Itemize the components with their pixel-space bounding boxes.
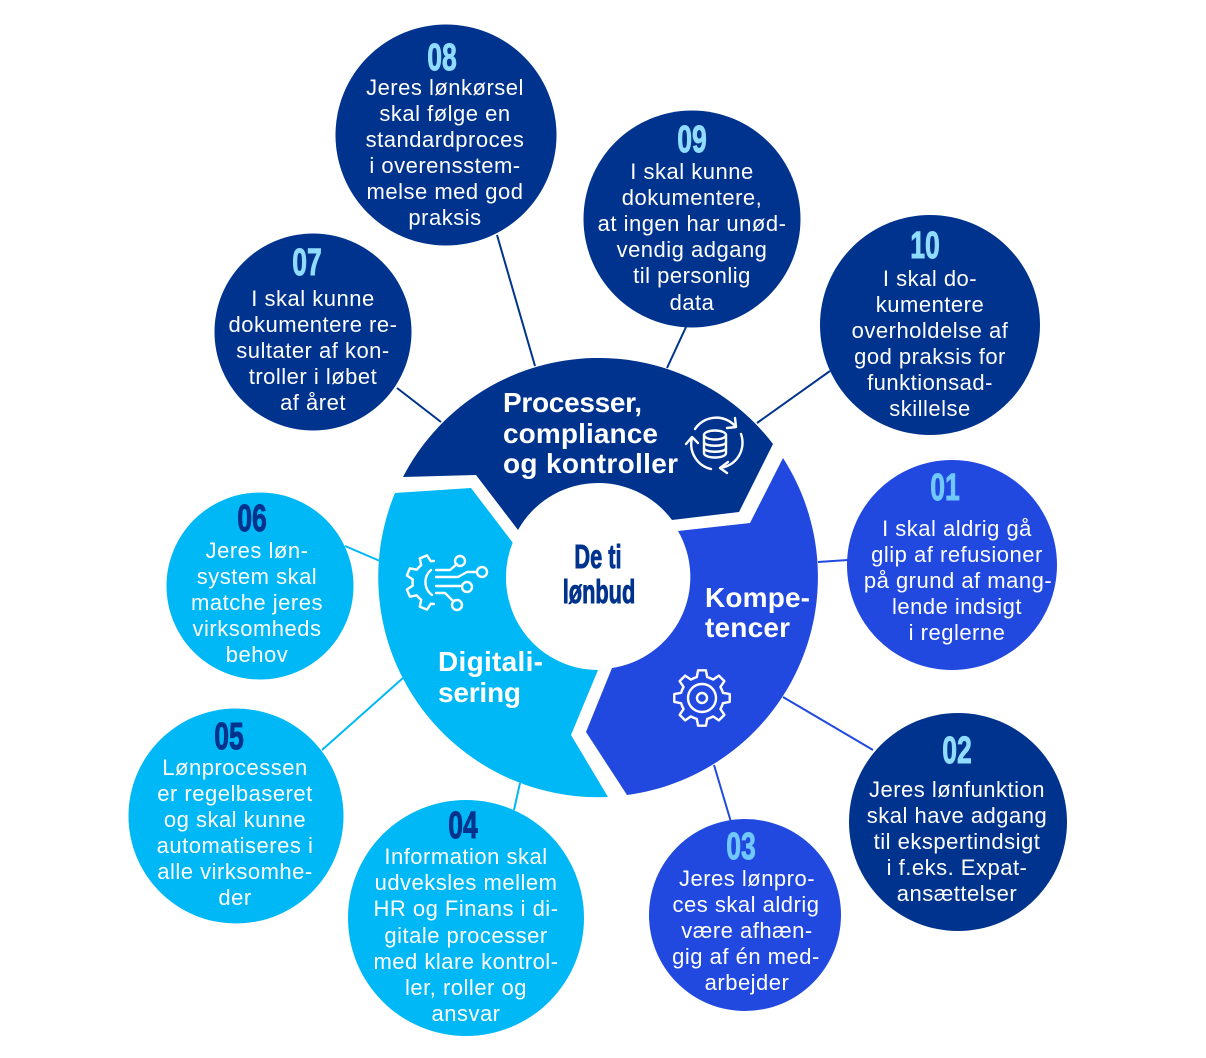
bubble 01: på grund af mang- (864, 568, 1052, 593)
bubble 01: glip af refusioner (871, 542, 1043, 567)
bubble 06: 06 (237, 496, 267, 539)
ring segment: Processer, compliance og kontroller: og kontroller (503, 448, 678, 479)
bubble 10: kumentere (876, 292, 984, 317)
bubble 03: gig af én med- (672, 944, 820, 969)
ring segment: Kompetencer (586, 458, 818, 795)
bubble 07: I skal kunne (251, 286, 375, 311)
bubble 02: ansættelser (897, 881, 1017, 906)
bubble 08: 08 (427, 35, 457, 78)
bubble 09 (584, 110, 800, 328)
bubble 10 (820, 215, 1040, 435)
bubble 08 (336, 24, 556, 246)
bubble 09: 09 (677, 117, 707, 160)
ring segment: Kompetencer: tencer (705, 612, 790, 643)
bubble 05: automatiseres i (157, 833, 313, 858)
bubble 08: i overensstem- (369, 153, 521, 178)
bubble 05: er regelbaseret (157, 781, 313, 806)
bubble 06: matche jeres (191, 590, 323, 615)
bubble 06: system skal (197, 564, 317, 589)
bubble 04: HR og Finans i di- (373, 896, 559, 921)
bubble 08: standardproces (366, 127, 524, 152)
bubble 02: Jeres lønfunktion (869, 777, 1045, 802)
bubble 06: behov (226, 642, 288, 667)
bubble 08: praksis (408, 205, 482, 230)
bubble 06 (166, 492, 354, 680)
center title: De ti lønbud: lønbud (563, 573, 635, 610)
bubble 05: og skal kunne (164, 807, 306, 832)
bubble 07: 07 (292, 240, 322, 283)
bubble 03: 03 (726, 824, 756, 867)
bubble 03: arbejder (705, 970, 789, 995)
ring segment: Processer, compliance og kontroller: compliance (503, 418, 658, 449)
bubble 09: vendig adgang (617, 237, 767, 262)
bubble 07: sultater af kon- (236, 338, 390, 363)
bubble 02 (849, 713, 1067, 931)
bubble 03: ces skal aldrig (673, 892, 819, 917)
bubble 09: til personlig (633, 263, 751, 288)
bubble 04: gitale processer (384, 923, 548, 948)
bubble 01: lende indsigt (892, 594, 1022, 619)
bubble 10: I skal do- (883, 266, 977, 291)
bubble 02: skal have adgang (867, 803, 1047, 828)
bubble 05: der (218, 885, 252, 910)
bubble 04: ansvar (431, 1001, 501, 1026)
bubble 08: Jeres lønkørsel (366, 75, 524, 100)
bubble 10: funktionsad- (867, 370, 993, 395)
bubble 10: god praksis for (854, 344, 1006, 369)
bubble 01: 01 (930, 465, 960, 508)
center title: De ti lønbud (506, 485, 690, 669)
bubble 05: Lønprocessen (162, 755, 308, 780)
ring segment: Processer, compliance og kontroller (403, 358, 773, 530)
bubble 09: dokumentere, (622, 185, 762, 210)
bubble 06: virksomheds (193, 616, 321, 641)
bubble 02: 02 (942, 728, 972, 771)
bubble 07: af året (280, 390, 346, 415)
bubble 09: I skal kunne (630, 159, 754, 184)
icon: gear (674, 670, 730, 726)
bubble 05 (128, 708, 344, 924)
bubble 08: melse med god (367, 179, 523, 204)
bubble 01: i reglerne (909, 620, 1005, 645)
bubble 08: skal følge en (379, 101, 511, 126)
bubble 06: Jeres løn- (206, 538, 308, 563)
bubble 07 (214, 234, 412, 430)
bubble 04: Information skal (384, 844, 548, 869)
ring segment: Processer, compliance og kontroller: Processer, (503, 387, 642, 418)
icon: database with circular arrows (686, 418, 743, 473)
bubble 04 (348, 800, 584, 1036)
bubble 10: overholdelse af (852, 318, 1009, 343)
bubble 09: at ingen har unød- (598, 211, 786, 236)
bubble 04: ler, roller og (405, 975, 527, 1000)
bubble 10: skillelse (889, 396, 971, 421)
bubble 02: til ekspertindsigt (874, 829, 1040, 854)
bubble 01: I skal aldrig gå (882, 516, 1032, 541)
bubble 04: 04 (448, 803, 478, 846)
bubble 03: være afhæn- (681, 918, 813, 943)
ring segment: Digitalisering (378, 488, 608, 797)
bubble 05: 05 (214, 714, 244, 757)
bubble 04: med klare kontrol- (373, 949, 559, 974)
bubble 07: dokumentere re- (229, 312, 397, 337)
icon: gear with circuit lines (405, 554, 487, 611)
bubble 02: i f.eks. Expat- (887, 855, 1027, 880)
bubble 05: alle virksomhe- (157, 859, 313, 884)
ring segment: Digitalisering: Digitali- (438, 646, 543, 677)
bubble 09: data (670, 290, 715, 315)
bubble 10: 10 (910, 223, 940, 266)
ring segment: Kompetencer: Kompe- (705, 582, 810, 613)
bubble 03: Jeres lønpro- (679, 866, 815, 891)
ring segment: Digitalisering: sering (438, 677, 521, 708)
bubble 03 (649, 819, 841, 1011)
center title: De ti lønbud: De ti (574, 538, 622, 575)
bubble 04: udveksles mellem (375, 870, 557, 895)
bubble 01 (847, 460, 1057, 670)
bubble 07: troller i løbet (249, 364, 377, 389)
